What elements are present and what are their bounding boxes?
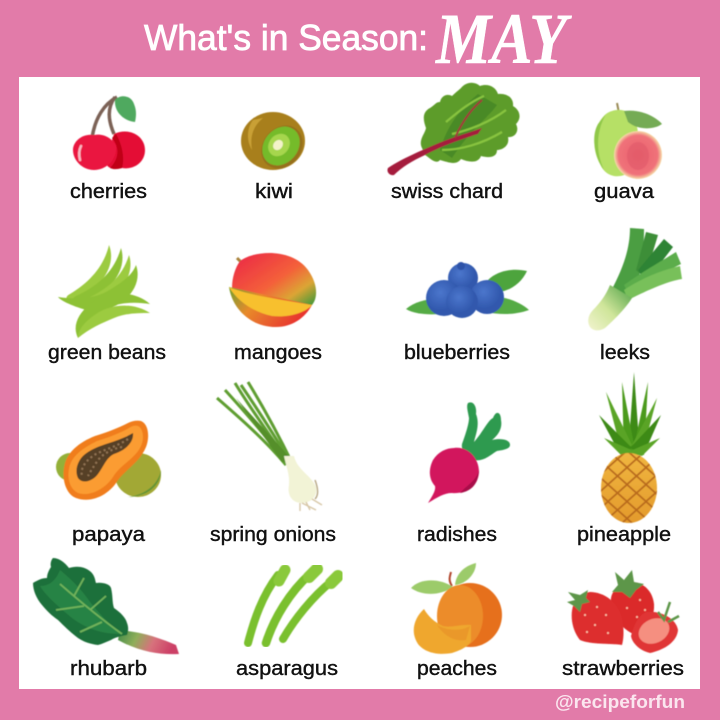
label: guava: guava	[594, 181, 655, 203]
label: rhubarb: rhubarb	[70, 658, 147, 680]
icon: mangoes	[229, 253, 316, 327]
label: papaya: papaya	[72, 524, 146, 546]
icon: papaya	[56, 421, 161, 500]
icon: blueberries	[406, 262, 529, 318]
title: MAY	[435, 0, 572, 79]
label: peaches: peaches	[417, 658, 497, 680]
label: mangoes: mangoes	[234, 342, 322, 364]
icon: leeks	[588, 228, 682, 330]
icon: kiwi	[241, 112, 311, 177]
icon: cherries	[73, 96, 145, 170]
icon: spring onions	[217, 382, 322, 511]
label: swiss chard: swiss chard	[391, 181, 503, 203]
icon: strawberries	[567, 570, 679, 653]
icon: pineapple	[599, 372, 661, 523]
label: kiwi: kiwi	[255, 181, 293, 203]
label: strawberries: strawberries	[562, 658, 684, 680]
icon: peaches	[411, 563, 502, 654]
label: leeks: leeks	[600, 342, 650, 364]
label: asparagus: asparagus	[236, 658, 338, 680]
icon: radishes	[428, 402, 510, 503]
icon: guava	[594, 103, 662, 179]
icon: swiss chard	[387, 83, 520, 175]
label: cherries: cherries	[70, 181, 147, 203]
credit: handle: @recipeforfun	[555, 692, 685, 712]
icon: rhubarb	[33, 558, 179, 654]
title: What's in Season:	[144, 17, 428, 58]
label: spring onions: spring onions	[210, 524, 336, 546]
label: blueberries: blueberries	[404, 342, 510, 364]
title	[144, 0, 572, 79]
label: radishes: radishes	[417, 524, 497, 546]
icon: green beans	[58, 245, 150, 338]
label: pineapple: pineapple	[577, 524, 671, 546]
label: green beans: green beans	[48, 342, 166, 364]
icon: asparagus	[248, 569, 338, 643]
